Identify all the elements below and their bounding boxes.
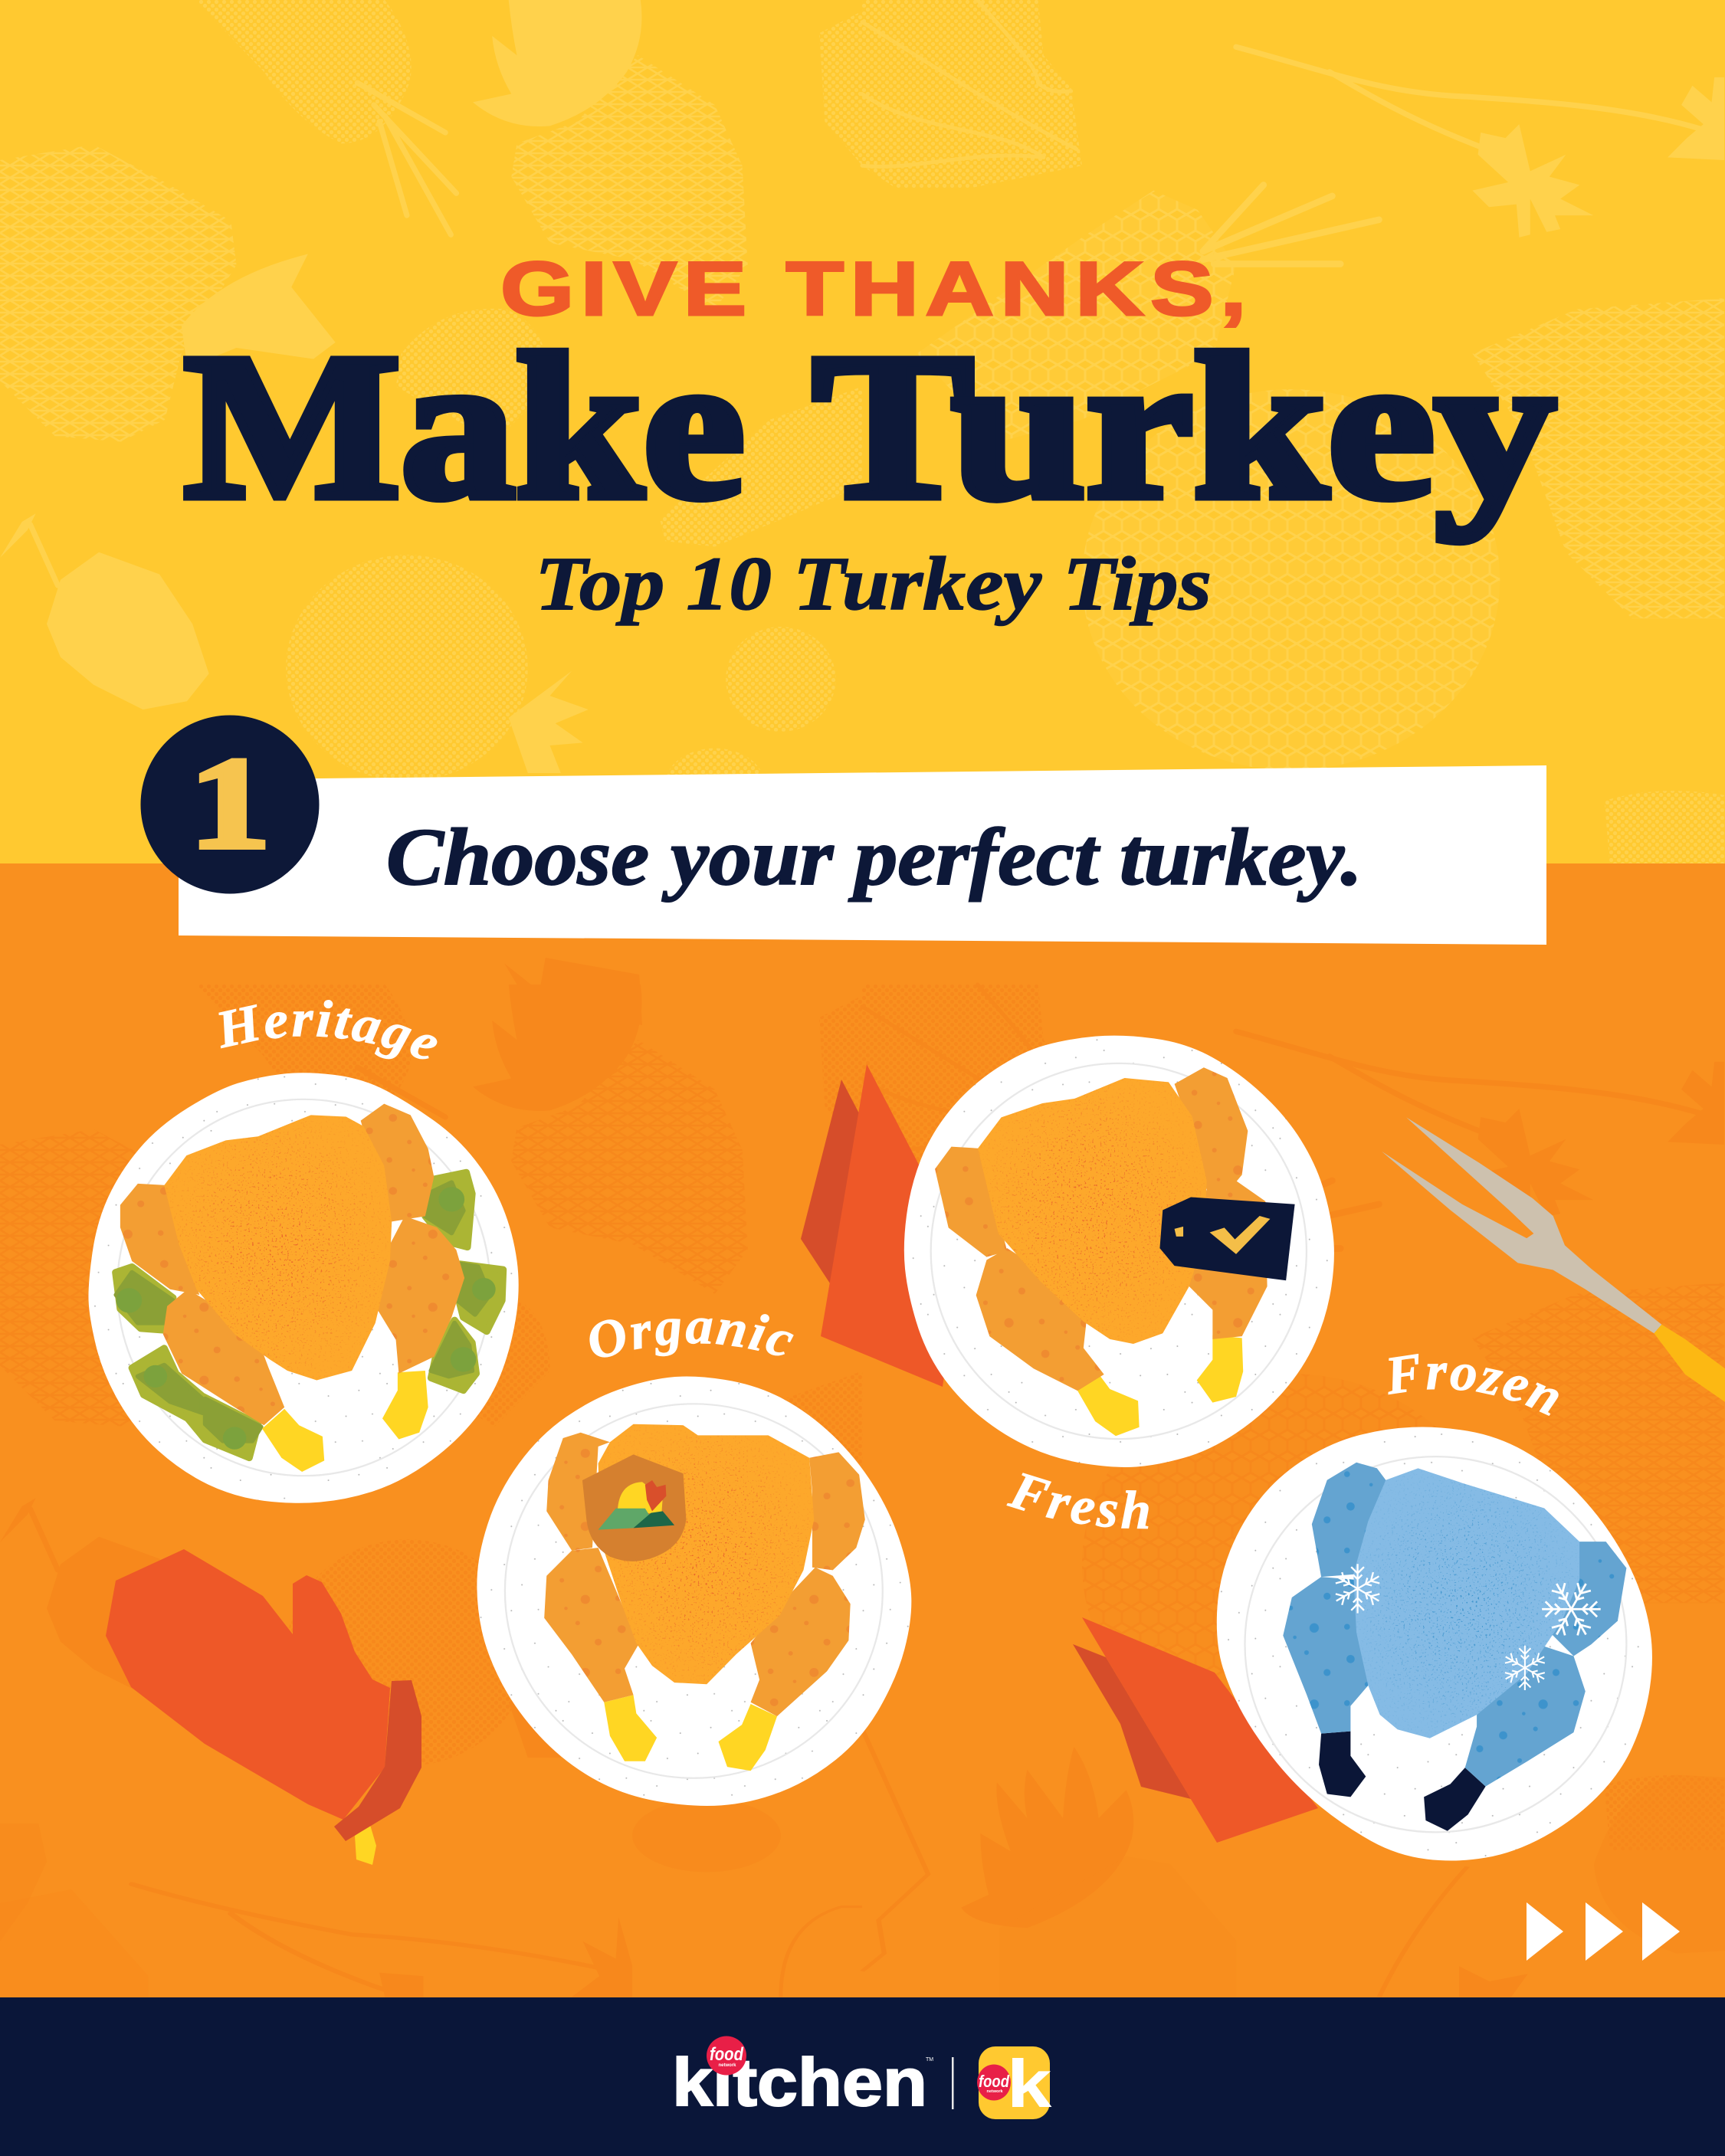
yellow background produce pattern [0,0,1724,866]
plate [477,1377,911,1806]
kitchen wordmark: kitchen [672,2044,927,2120]
food network seal: network [718,2063,736,2068]
app icon [977,2046,1052,2122]
label: frozen: Frozen [1388,1353,1559,1416]
label: organic: Organic [589,1314,794,1358]
app icon: food [979,2072,1009,2091]
footer band [0,1997,1725,2156]
step heading: Choose your perfect turkey. [386,812,1363,902]
title block [184,247,1556,626]
oven mitt [106,1549,421,1865]
turkey [935,1067,1268,1436]
app icon: network [986,2089,1003,2094]
number badge [141,716,319,893]
food network seal: food [710,2044,744,2065]
next arrows [1527,1902,1680,1961]
trademark: TM [926,2057,933,2063]
kicker: give thanks: GIVE THANKS, [500,247,1253,331]
organic badge [582,1454,686,1561]
plate [1217,1427,1652,1860]
label: fresh: Fresh [1006,1473,1149,1529]
white banner [179,765,1546,945]
subtitle: Top 10 Turkey Tips [535,541,1212,626]
napkin behind frozen turkey [1073,1617,1318,1843]
orange background produce pattern [0,958,1725,1997]
step one banner [141,716,1546,945]
garnish greens [116,1172,503,1458]
panel: heritage turkey [88,1000,519,1503]
plate [88,1073,519,1503]
label: heritage: Heritage [218,1000,437,1059]
turkey [120,1104,464,1472]
app icon: k [1007,2046,1052,2122]
panel: organic turkey [477,1314,912,1806]
plate [904,1036,1334,1467]
panel: fresh turkey [904,1036,1334,1529]
number badge: 1 [189,731,271,876]
food network seal [707,2036,746,2075]
footer logo: food network kitchen [672,2036,1052,2122]
main title: make turkey: Make [184,311,745,542]
napkin behind fresh turkey [801,1064,966,1387]
turkey [544,1424,865,1771]
divider [952,2057,953,2109]
orange lower background [0,863,1725,1998]
carving fork [1382,1117,1725,1402]
yellow upper background [0,0,1725,863]
main title: make turkey: Turkey [812,311,1556,542]
panel: frozen turkey [1217,1353,1652,1860]
snowflakes [1333,1564,1612,1690]
main title: make turkey [184,311,1556,542]
frozen turkey [1283,1463,1626,1831]
price tag with check [1159,1198,1295,1280]
